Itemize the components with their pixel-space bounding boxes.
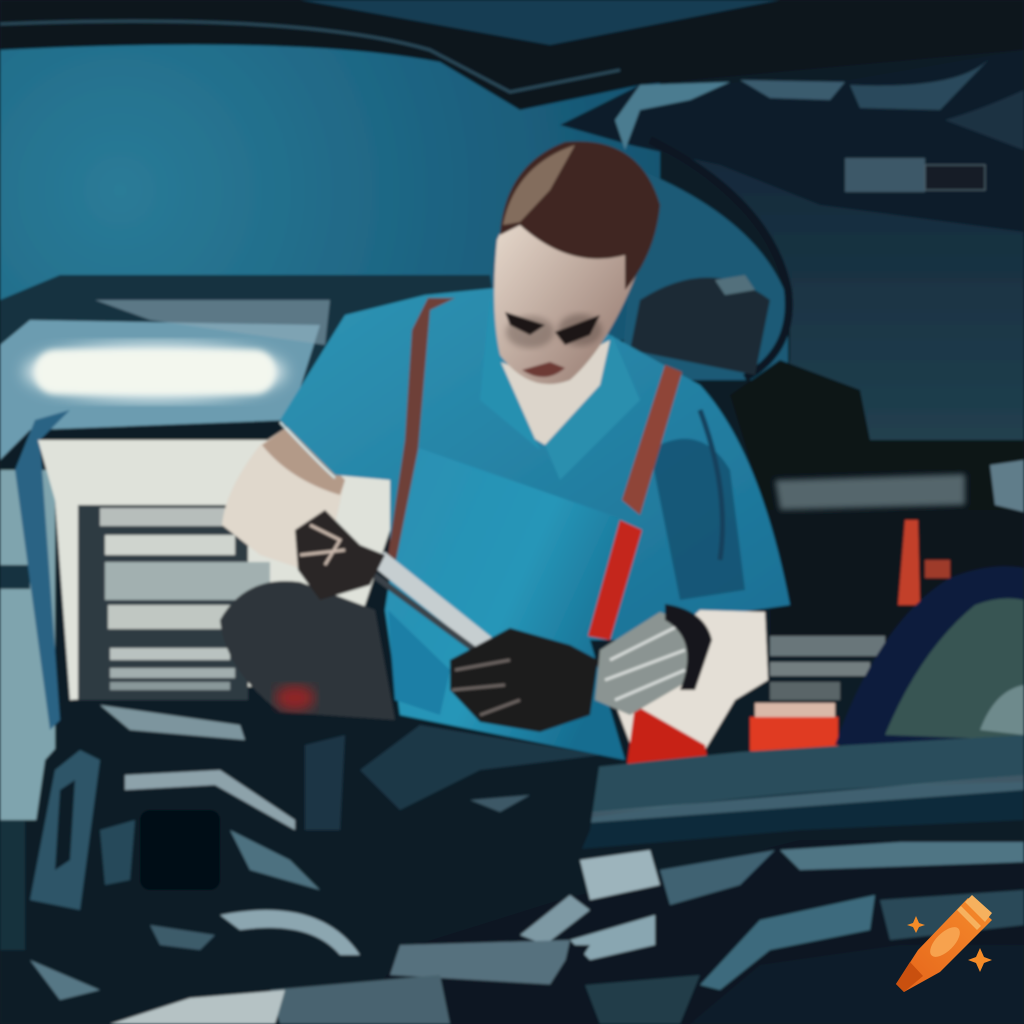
icon: sparkle bottom (968, 948, 992, 972)
mechanic: apron straps (388, 298, 455, 560)
mechanic: left arm (222, 425, 345, 570)
car hood edge in foreground (470, 735, 1024, 850)
mechanic: shirt (280, 288, 790, 640)
mechanic: collar and neck (495, 340, 610, 445)
mechanic: knee (220, 581, 395, 720)
engine: centre dark mass (300, 720, 600, 960)
mechanic: knit sleeve (595, 612, 695, 715)
mechanic: right glove (450, 628, 598, 732)
mechanic: hair (500, 141, 660, 290)
mechanic: apron (385, 445, 625, 760)
mechanic: head (494, 190, 640, 384)
headlight glow and front panel (0, 300, 330, 460)
open car bonnet at top (0, 0, 1024, 378)
engine: right foreground parts (110, 840, 1024, 1024)
mechanic: left glove (295, 510, 385, 600)
engine: left block (0, 705, 360, 1024)
right side engine bay background (730, 360, 1024, 751)
car windshield on right (835, 566, 1024, 745)
icon: crayon watermark (896, 895, 992, 992)
mechanic (220, 141, 790, 780)
radiator grille unit (15, 410, 400, 730)
icon: sparkle top (907, 916, 925, 933)
mechanic: wrench (360, 552, 495, 652)
mechanic: right forearm (610, 610, 768, 770)
